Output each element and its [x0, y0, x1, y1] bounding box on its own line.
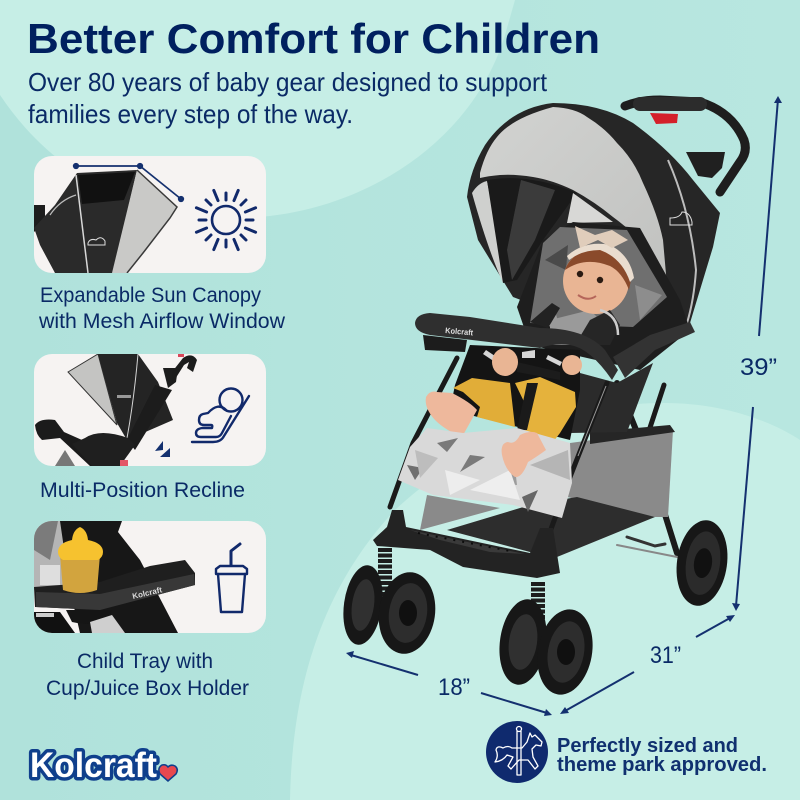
springs [385, 548, 538, 632]
baby legs [426, 377, 576, 450]
seat side panel [570, 363, 653, 433]
canopy photo detail [34, 170, 177, 273]
logo: Kolcraft: Kolcraft [30, 746, 157, 785]
label: canopy [38, 284, 286, 333]
canopy logo [670, 212, 692, 225]
harness strap [483, 350, 562, 430]
label: tray [46, 650, 249, 700]
baby head [550, 226, 634, 345]
mesh basket [420, 425, 675, 557]
subtitle: families every step of the way. [28, 99, 353, 129]
tray photo detail [34, 521, 195, 633]
callout: theme park approved: theme park approved. [557, 754, 767, 776]
tray [415, 313, 618, 380]
callout: theme park approved [557, 735, 767, 776]
arrow: width [346, 651, 552, 716]
subtitle: Over 80 years of baby gear designed to support [28, 67, 548, 97]
label: canopy: Expandable Sun Canopy [40, 284, 261, 307]
label: 39 inch: 39” [740, 354, 777, 381]
badge: carousel horse [486, 721, 548, 783]
arrow: length [560, 615, 735, 714]
title: Better Comfort for Children [27, 15, 600, 62]
harness pads [530, 303, 620, 345]
label: tray: Cup/Juice Box Holder [46, 677, 249, 700]
icon: car seat recline [192, 388, 249, 442]
panel: recline card [34, 354, 266, 466]
seat footrest cloth [398, 428, 572, 518]
label: canopy: with Mesh Airflow Window [38, 310, 286, 333]
icon: recline arrows [155, 441, 170, 457]
icon: expansion lines [74, 164, 183, 201]
label: 31 inch: 31” [650, 642, 681, 669]
canopy top panel [480, 107, 668, 297]
handlebar [625, 100, 745, 192]
wheel: rear right [671, 517, 733, 609]
panel: sun canopy card [34, 156, 266, 273]
wheels: front right [494, 596, 599, 699]
footrest plate [373, 510, 560, 578]
tray: Kolcraft [445, 326, 474, 337]
icon: sun [196, 190, 256, 250]
label: recline: Multi-Position Recline [40, 479, 245, 502]
front right tube [547, 383, 607, 540]
canopy underside [472, 178, 613, 283]
canopy back [467, 103, 720, 333]
canopy piping [668, 160, 696, 323]
icon: logo heart [159, 765, 177, 781]
seat lower [450, 345, 580, 440]
callout: theme park approved: Perfectly sized and [557, 735, 738, 757]
arrow: height [732, 96, 782, 611]
label: 18 inch: 18” [438, 674, 470, 701]
stroller illustration [339, 100, 745, 699]
label: tray: Child Tray with [77, 650, 213, 673]
tube highlight [578, 386, 606, 456]
tray photo detail: Kolcraft [131, 585, 163, 601]
baby foot right [502, 432, 546, 477]
wheels: front left [339, 563, 440, 657]
seat back [517, 222, 690, 370]
panel: tray card [34, 521, 266, 633]
baby hands [492, 348, 582, 376]
armrest [613, 322, 695, 378]
recline photo detail [35, 354, 197, 466]
subtitle [28, 67, 548, 129]
rear tubes and frame [390, 358, 677, 557]
icon: cup with straw [216, 544, 247, 612]
